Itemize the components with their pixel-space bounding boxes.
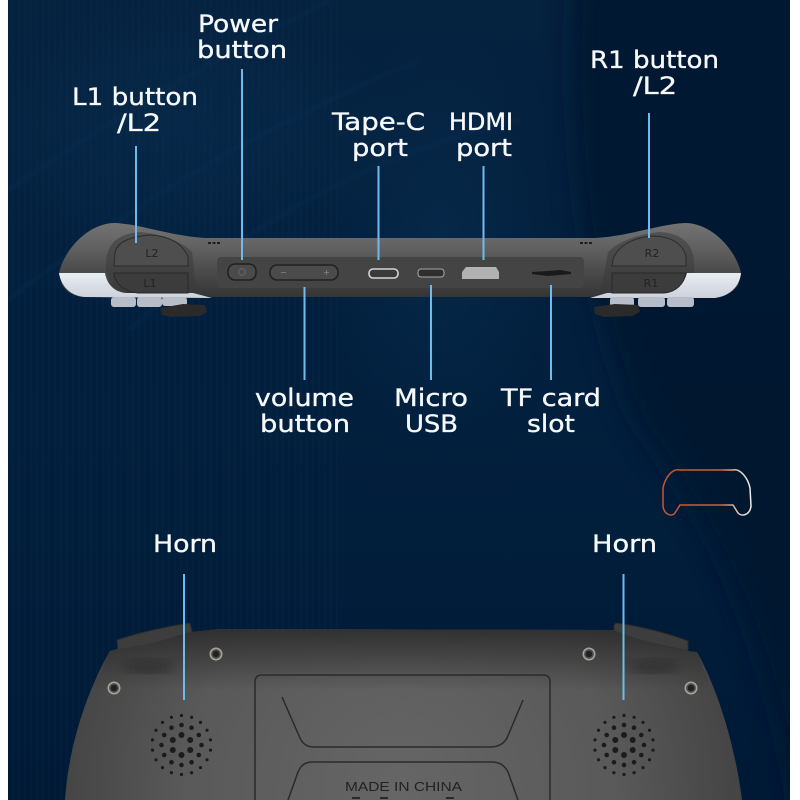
label: Type-C port bbox=[331, 108, 425, 162]
trigger shadows bbox=[122, 659, 680, 673]
device top edge body bbox=[59, 223, 741, 297]
tf card slot bbox=[532, 270, 571, 276]
L1 trigger bbox=[114, 273, 188, 293]
micro usb port bbox=[418, 269, 444, 277]
L2 trigger bbox=[114, 235, 188, 266]
volume button bbox=[270, 265, 338, 280]
port panel bbox=[217, 257, 584, 288]
device back view bbox=[65, 623, 742, 800]
label: micro usb bbox=[394, 384, 468, 438]
left trigger surround bbox=[106, 232, 197, 296]
R2 trigger bbox=[612, 236, 686, 266]
R1 trigger: R1 bbox=[644, 277, 658, 290]
label: micro usb: USB bbox=[405, 410, 458, 438]
label: tf card slot: TF card bbox=[500, 384, 601, 412]
right speaker bbox=[593, 714, 655, 776]
label: HDMI port: port bbox=[456, 134, 512, 162]
right trigger surround bbox=[600, 232, 694, 296]
hdmi port bbox=[462, 267, 499, 279]
usb-c port bbox=[369, 269, 398, 278]
device top view bbox=[59, 223, 741, 317]
right face buttons bbox=[610, 297, 694, 307]
label: L1 button: /L2 bbox=[117, 109, 161, 137]
right white trim bbox=[590, 273, 741, 298]
pointer lines bbox=[136, 69, 649, 700]
battery cover bbox=[255, 675, 550, 800]
made in china text: MADE IN CHINA bbox=[345, 779, 462, 794]
label: R1 button: R1 button bbox=[590, 46, 719, 74]
label: tf card slot bbox=[500, 384, 601, 438]
label: left horn: Horn bbox=[153, 530, 217, 558]
vents bbox=[208, 242, 592, 244]
left speaker bbox=[151, 714, 212, 776]
label: R1 button: /L2 bbox=[633, 72, 677, 100]
label: tf card slot: slot bbox=[527, 410, 575, 438]
label: power button: button bbox=[197, 36, 287, 64]
label: micro usb: Micro bbox=[394, 384, 468, 412]
label: power button: Power bbox=[198, 10, 278, 38]
label: L1 button: L1 button bbox=[72, 83, 198, 111]
label: R1 button bbox=[590, 46, 719, 100]
label: power button bbox=[197, 10, 287, 64]
label: Type-C port: port bbox=[352, 134, 408, 162]
label: volume button: volume bbox=[255, 384, 354, 412]
L1 trigger: L1 bbox=[143, 277, 157, 290]
screws bbox=[108, 648, 698, 694]
label: HDMI port bbox=[449, 108, 513, 162]
label: volume button bbox=[255, 384, 354, 438]
right shoulder trigger bbox=[614, 623, 688, 651]
R2 trigger: R2 bbox=[645, 247, 659, 260]
power button bbox=[228, 264, 256, 280]
left face buttons bbox=[111, 297, 187, 307]
left white trim bbox=[59, 273, 212, 298]
back body bbox=[65, 629, 742, 800]
label: HDMI port: HDMI bbox=[449, 108, 513, 136]
label: volume button: button bbox=[260, 410, 350, 438]
label: Type-C port: Tape-C bbox=[331, 108, 425, 136]
controller outline icon bbox=[663, 470, 751, 515]
left shoulder trigger bbox=[117, 623, 192, 651]
right thumbstick bbox=[594, 304, 640, 317]
left thumbstick bbox=[160, 304, 207, 317]
R1 trigger bbox=[612, 273, 686, 293]
bottom marks bbox=[352, 797, 454, 799]
label: right horn: Horn bbox=[592, 530, 657, 558]
L2 trigger: L2 bbox=[145, 247, 159, 260]
label: L1 button bbox=[72, 83, 198, 137]
